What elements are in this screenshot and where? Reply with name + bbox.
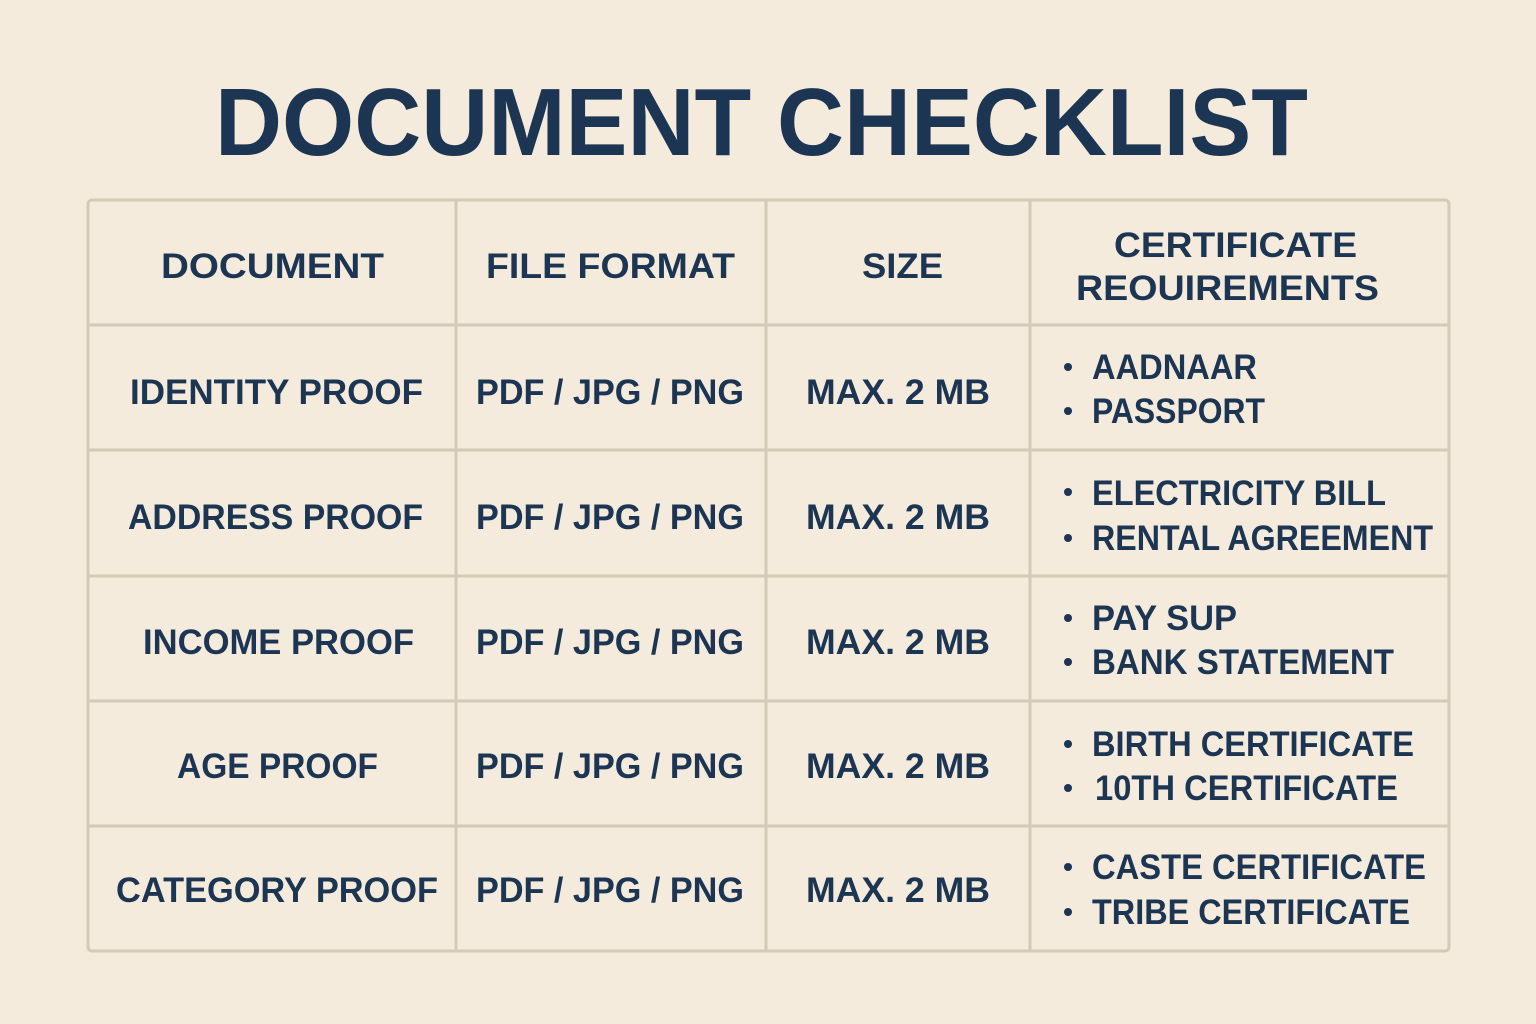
row: income proof <box>143 599 1394 682</box>
row: income proof: MAX. 2 MB <box>806 623 990 662</box>
row: address proof: PDF / JPG / PNG <box>476 498 744 537</box>
row: age proof: BIRTH CERTIFICATE <box>1092 725 1414 764</box>
header row: CERTIFICATE <box>1114 226 1357 265</box>
row: category proof: TRIBE CERTIFICATE <box>1092 893 1410 932</box>
row: age proof <box>177 725 1414 808</box>
header row <box>161 226 1379 308</box>
header row: REOUIREMENTS <box>1076 269 1379 308</box>
row: category proof: CASTE CERTIFICATE <box>1092 848 1426 887</box>
row: identity proof: PASSPORT <box>1092 392 1265 431</box>
row: income proof: BANK STATEMENT <box>1092 643 1394 682</box>
row: address proof: ADDRESS PROOF <box>128 498 423 537</box>
row: identity proof <box>130 348 1265 431</box>
row: address proof <box>128 474 1433 558</box>
row: identity proof: AADNAAR <box>1092 348 1257 387</box>
row: category proof: PDF / JPG / PNG <box>476 871 744 910</box>
table <box>88 200 1449 951</box>
row: identity proof: MAX. 2 MB <box>806 373 990 412</box>
row: address proof: ELECTRICITY BILL <box>1092 474 1386 513</box>
row: identity proof: PDF / JPG / PNG <box>476 373 744 412</box>
row: identity proof: IDENTITY PROOF <box>130 373 423 412</box>
row: age proof: AGE PROOF <box>177 747 378 786</box>
row: category proof: CATEGORY PROOF <box>116 871 438 910</box>
row: category proof: MAX. 2 MB <box>806 871 990 910</box>
row: age proof: 10TH CERTIFICATE <box>1095 769 1398 808</box>
header row: DOCUMENT <box>161 247 384 286</box>
row: age proof: MAX. 2 MB <box>806 747 990 786</box>
row: address proof: MAX. 2 MB <box>806 498 990 537</box>
row: income proof: PAY SUP <box>1092 599 1237 638</box>
header row: SIZE <box>862 247 943 286</box>
row: income proof: PDF / JPG / PNG <box>476 623 744 662</box>
header row: FILE FORMAT <box>486 247 735 286</box>
row: category proof <box>116 848 1426 932</box>
row: income proof: INCOME PROOF <box>143 623 414 662</box>
row: address proof: RENTAL AGREEMENT <box>1092 519 1433 558</box>
title: DOCUMENT CHECKLIST <box>215 69 1308 176</box>
row: age proof: PDF / JPG / PNG <box>476 747 744 786</box>
